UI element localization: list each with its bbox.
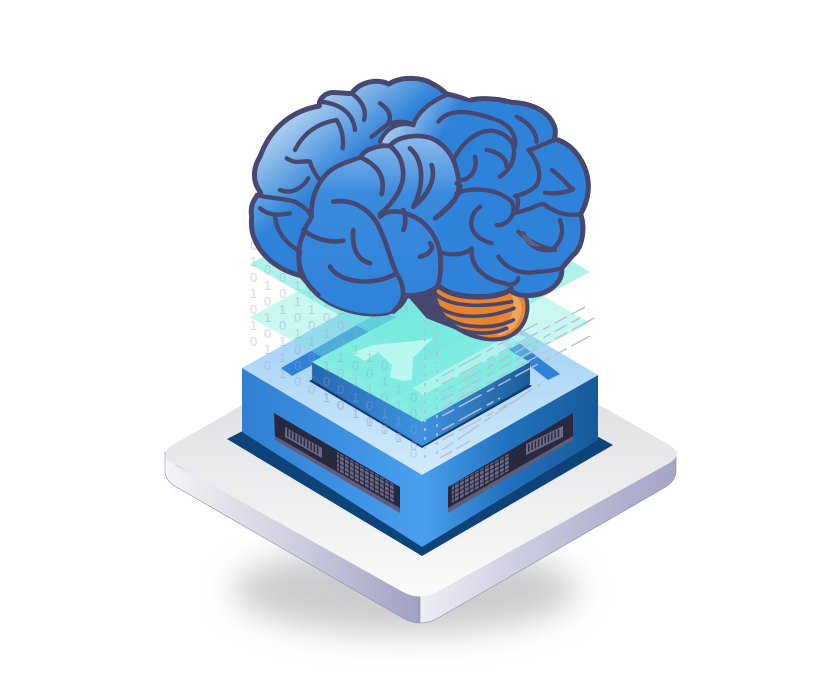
binary digits: 101001011010 bbox=[250, 318, 417, 421]
cerebellum folds bbox=[437, 295, 514, 333]
ground shadow bbox=[233, 546, 577, 634]
chip right face bbox=[422, 362, 530, 446]
front lobe outlines bbox=[299, 136, 460, 312]
binary digits bbox=[250, 238, 417, 461]
back lobe folds bbox=[257, 93, 447, 276]
block top face bbox=[242, 270, 598, 475]
groove: left bar bbox=[281, 312, 400, 376]
left small port bbox=[285, 427, 322, 458]
right grid panel bbox=[452, 453, 510, 503]
cerebellum highlight bbox=[497, 293, 522, 336]
brain stem and cerebellum bbox=[405, 283, 527, 340]
platform right side bbox=[420, 452, 676, 623]
code lines bbox=[440, 307, 598, 458]
translucent data layer upper bbox=[250, 170, 590, 362]
letter I on chip bbox=[413, 333, 530, 395]
binary digits: 1010100 bbox=[323, 390, 417, 461]
code dash lines bbox=[425, 307, 598, 462]
platform left side bbox=[165, 452, 420, 623]
dotted column right bbox=[436, 325, 438, 455]
binary digits: 011010010110 bbox=[250, 334, 417, 437]
chip recess shadow bbox=[309, 330, 532, 448]
left grid panel bbox=[337, 452, 395, 503]
right vent window bbox=[448, 413, 573, 513]
letter A on chip bbox=[352, 338, 433, 381]
binary digits: 01001011010 bbox=[264, 358, 417, 453]
cerebellum bbox=[435, 287, 527, 340]
brain silhouette bbox=[251, 78, 588, 314]
processor block bbox=[242, 270, 598, 547]
left vent window bbox=[274, 413, 400, 513]
front lobe fill bbox=[299, 136, 459, 314]
right small port bbox=[526, 426, 563, 455]
binary digits: 1001011 bbox=[250, 254, 344, 317]
chip left face bbox=[312, 362, 422, 446]
chip top face bbox=[312, 303, 530, 422]
binary digits: 010110 bbox=[250, 238, 330, 293]
platform top surface bbox=[166, 308, 676, 596]
groove: right bar bbox=[497, 336, 560, 380]
block right face bbox=[422, 375, 598, 547]
brain stem bbox=[405, 283, 457, 330]
platform: white rounded base bbox=[165, 308, 676, 623]
right hemisphere highlight bbox=[380, 97, 500, 145]
building base shadow bbox=[227, 340, 613, 556]
small dark accent bbox=[522, 233, 542, 247]
binary digits: 1010010110 bbox=[250, 286, 388, 373]
dotted column left bbox=[424, 320, 426, 462]
binary digits: 01011001 bbox=[250, 270, 359, 341]
translucent data layer lower bbox=[250, 225, 590, 412]
brain bbox=[251, 78, 588, 314]
binary digits: 010110100110 bbox=[250, 302, 417, 405]
right lobe folds bbox=[438, 112, 581, 296]
block left face bbox=[242, 368, 422, 547]
